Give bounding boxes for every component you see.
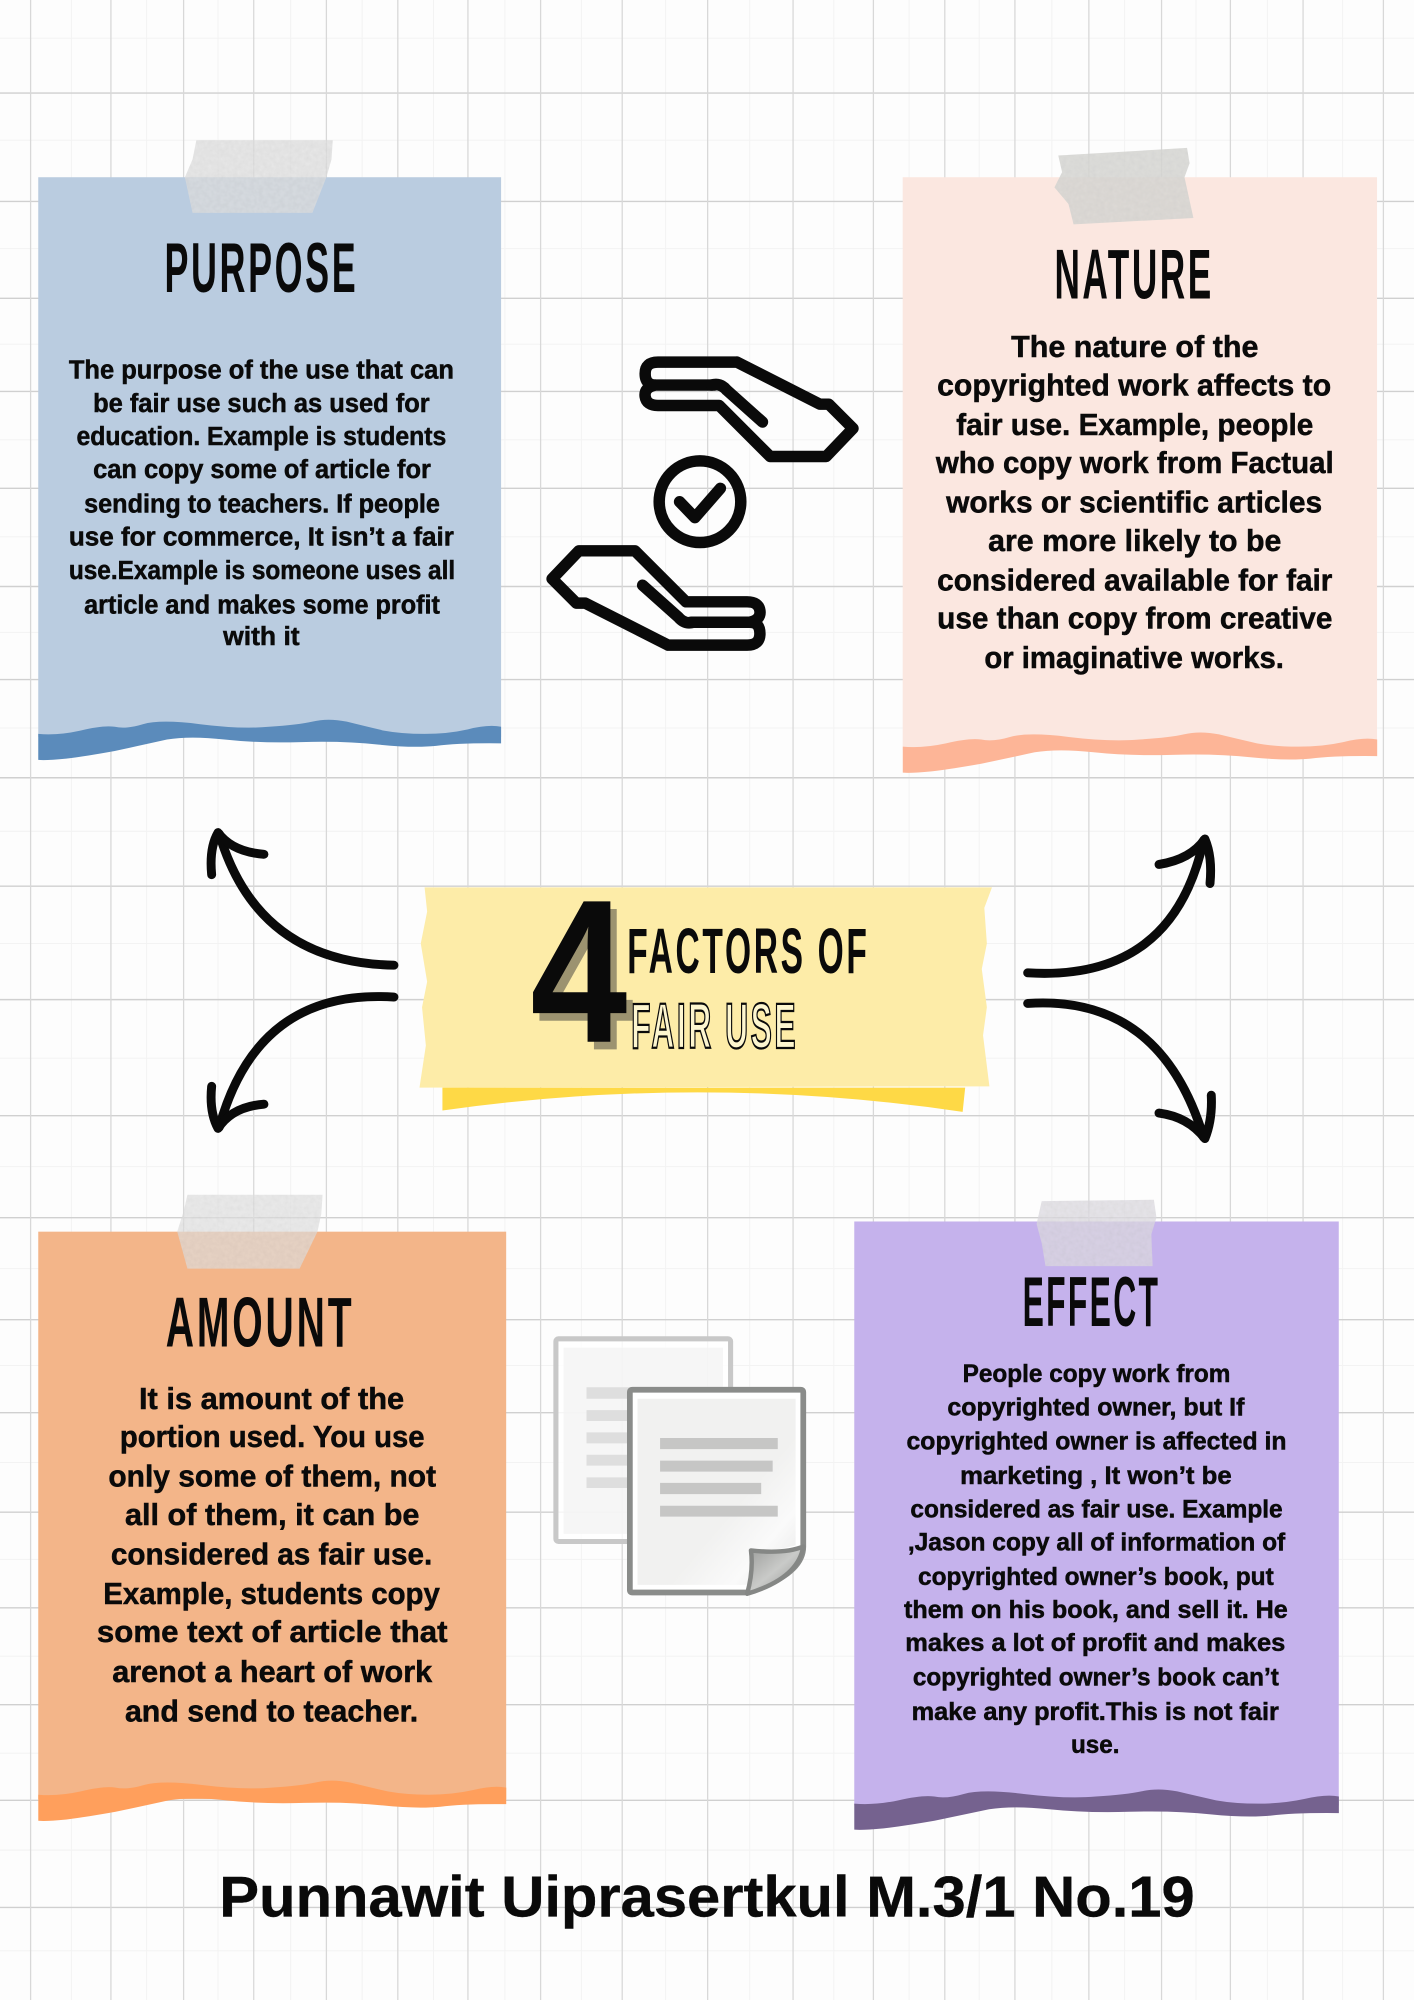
effect paper: [854, 1221, 1339, 1805]
big number 4: 4: [530, 858, 627, 1086]
arrow: to nature: [1028, 839, 1211, 973]
banner paper: [419, 887, 992, 1088]
amount paper: [38, 1232, 506, 1799]
amount text: all of them, it can be: [125, 1498, 419, 1532]
effect text: marketing , It won’t be: [960, 1462, 1232, 1490]
amount text: It is amount of the: [139, 1382, 404, 1416]
nature tape: [1054, 148, 1193, 224]
effect text: ,Jason copy all of information of: [908, 1528, 1286, 1556]
arrow: to amount: [211, 997, 394, 1128]
nature text: are more likely to be: [988, 524, 1281, 558]
amount text: [97, 1382, 448, 1728]
purpose tape: [185, 140, 333, 213]
nature text: fair use. Example, people: [956, 408, 1313, 442]
amount text: considered as fair use.: [111, 1537, 432, 1571]
amount text: and send to teacher.: [125, 1694, 418, 1728]
center banner: [419, 858, 992, 1112]
arrow: to purpose: [211, 833, 394, 965]
banner shadow strip: [442, 1088, 965, 1112]
amount text: only some of them, not: [108, 1460, 436, 1494]
nature heading: NATURE: [1054, 235, 1214, 313]
icon: upper hand: [645, 362, 853, 456]
front document: [630, 1390, 803, 1594]
purpose text: The purpose of the use that can: [69, 357, 454, 385]
nature text: works or scientific articles: [945, 486, 1322, 520]
purpose text: use.Example is someone uses all: [69, 557, 455, 585]
panel: amount: [38, 1195, 506, 1821]
amount text: Example, students copy: [103, 1577, 440, 1611]
panel: effect: [854, 1200, 1339, 1830]
purpose text: sending to teachers. If people: [84, 491, 440, 519]
icon: hands with check mark: [552, 362, 853, 645]
effect text: considered as fair use. Example: [910, 1495, 1283, 1523]
back document: [556, 1339, 731, 1542]
effect text: them on his book, and sell it. He: [904, 1596, 1288, 1624]
effect text: use.: [1071, 1731, 1119, 1759]
big number 4: 4: [537, 865, 634, 1093]
nature text: or imaginative works.: [984, 641, 1284, 675]
amount torn edge: [38, 1781, 506, 1821]
nature text: [935, 330, 1334, 675]
amount text: arenot a heart of work: [112, 1655, 433, 1689]
nature torn edge: [903, 733, 1377, 773]
purpose heading: PURPOSE: [164, 229, 358, 307]
effect text: copyrighted owner’s book can’t: [913, 1664, 1279, 1692]
nature text: copyrighted work affects to: [937, 368, 1331, 402]
nature text: considered available for fair: [937, 563, 1332, 597]
center banner: FAIR USE: [631, 990, 798, 1062]
purpose text: with it: [222, 623, 300, 651]
panel: nature: [903, 148, 1377, 773]
effect text: copyrighted owner is affected in: [907, 1428, 1286, 1456]
purpose text: [69, 357, 455, 651]
arrow: to effect: [1028, 1003, 1211, 1139]
effect text: makes a lot of profit and makes: [905, 1629, 1285, 1657]
effect tape: [1037, 1200, 1156, 1266]
nature text: who copy work from Factual: [935, 446, 1334, 480]
amount text: portion used. You use: [120, 1420, 425, 1454]
icon: lower hand: [552, 551, 760, 645]
amount heading: AMOUNT: [166, 1283, 354, 1361]
effect text: [904, 1360, 1288, 1759]
icon: check circle: [659, 461, 741, 543]
purpose torn edge: [38, 720, 501, 760]
effect text: copyrighted owner, but If: [947, 1393, 1245, 1421]
purpose text: use for commerce, It isn’t a fair: [69, 524, 454, 552]
footer credit: Punnawit Uiprasertkul M.3/1 No.19: [219, 1865, 1195, 1929]
purpose text: can copy some of article for: [93, 456, 431, 484]
icon: copied documents: [556, 1339, 803, 1594]
purpose text: education. Example is students: [77, 423, 446, 451]
purpose text: article and makes some profit: [84, 591, 440, 619]
effect text: People copy work from: [963, 1360, 1230, 1388]
title: factors of: FACTORS OF: [627, 915, 870, 987]
panel: purpose: [38, 140, 501, 760]
nature text: use than copy from creative: [937, 602, 1332, 636]
effect torn edge: [854, 1789, 1339, 1830]
effect text: copyrighted owner’s book, put: [918, 1563, 1274, 1591]
nature text: The nature of the: [1011, 330, 1258, 364]
amount tape: [177, 1195, 323, 1269]
effect text: make any profit.This is not fair: [912, 1698, 1279, 1726]
purpose paper: [38, 177, 501, 737]
panel: effect: EFFECT: [1023, 1263, 1160, 1341]
purpose text: be fair use such as used for: [93, 390, 430, 418]
nature paper: [903, 177, 1377, 750]
amount text: some text of article that: [97, 1615, 448, 1649]
